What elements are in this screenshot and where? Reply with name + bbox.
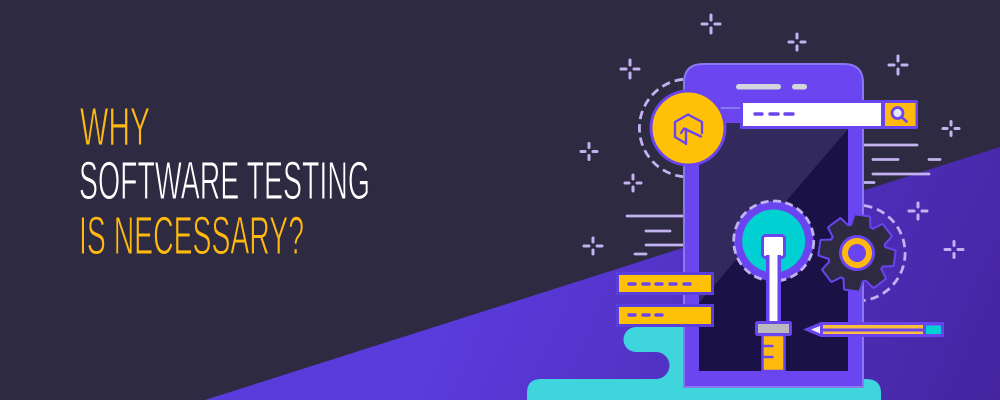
icon: magnifier (892, 108, 906, 122)
camera pill (792, 84, 807, 90)
gear outline (815, 211, 899, 295)
dashed arc around logo (639, 79, 683, 177)
sparkle (584, 238, 602, 254)
dashed arc around gear (864, 206, 905, 300)
tool ring (734, 201, 814, 281)
sparkle (945, 242, 963, 258)
sparkles (581, 15, 963, 258)
phone screen (699, 123, 848, 371)
title line: is necessary: IS NECESSARY? (79, 206, 304, 266)
pencil stripe lower (823, 332, 923, 334)
magnifier tool (734, 201, 814, 371)
ruler (762, 335, 784, 371)
sparkle (621, 60, 639, 78)
pencil body (803, 322, 944, 337)
yellow circle (651, 91, 725, 165)
title line: software testing: SOFTWARE TESTING (79, 151, 370, 211)
phone (684, 64, 863, 387)
title (79, 97, 370, 266)
search placeholder dashes (755, 112, 793, 116)
sparkle (889, 56, 907, 74)
phone body (684, 64, 863, 387)
grey collar (756, 322, 790, 334)
tool head (762, 236, 784, 258)
speed lines right (862, 145, 940, 182)
header line (720, 107, 741, 109)
search button (885, 103, 916, 126)
speed lines left (627, 216, 684, 254)
icon: hexagon arrow (675, 114, 702, 144)
gear yellow ring (843, 239, 871, 267)
sparkle (625, 175, 641, 191)
logo badge (651, 91, 725, 165)
sparkle (909, 203, 927, 219)
teal blob (527, 327, 881, 400)
status label two (618, 306, 712, 326)
tool stem (766, 255, 781, 323)
pencil stripes (823, 325, 923, 328)
pencil (803, 322, 944, 337)
pencil tip (811, 326, 820, 334)
gear fill (815, 211, 899, 295)
tool stem highlight (770, 253, 778, 323)
search input (743, 103, 881, 126)
title line: why: WHY (80, 97, 150, 157)
sparkle (943, 122, 959, 136)
sparkle (789, 34, 805, 50)
status label one (618, 274, 712, 294)
pencil eraser (926, 326, 941, 334)
speaker pill (736, 84, 781, 90)
gear hub (837, 233, 877, 273)
gear (815, 211, 899, 295)
search bar frame (740, 100, 918, 129)
sparkle (702, 15, 720, 33)
search bar (740, 100, 918, 129)
tool teal lens (742, 210, 805, 272)
ruler ticks (763, 346, 772, 357)
screen highlight (699, 123, 848, 303)
sparkle (581, 144, 597, 160)
purple diagonal panel (205, 147, 1000, 400)
